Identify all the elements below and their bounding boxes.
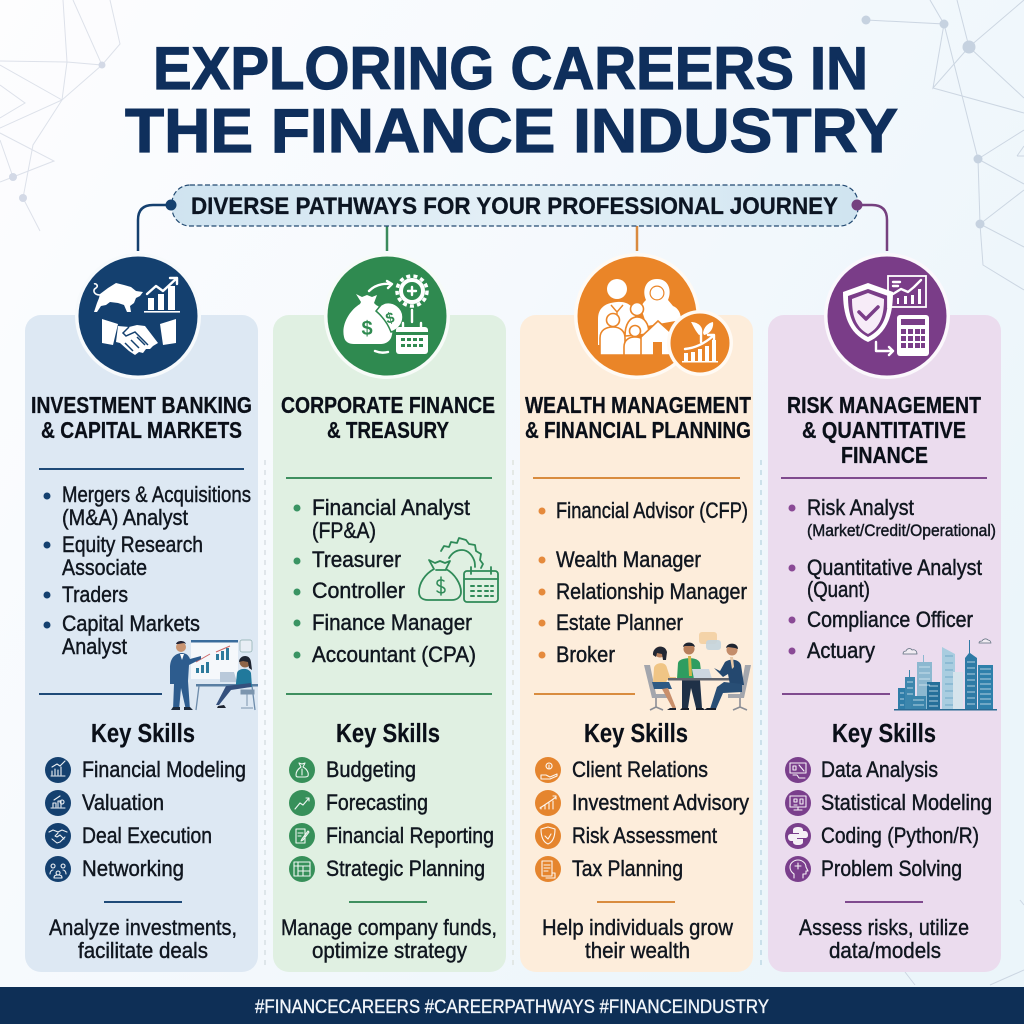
illustration: analyst presentation	[170, 640, 258, 710]
skills list: Valuation	[82, 790, 164, 815]
panel: corporate finance	[273, 253, 506, 972]
icon: shield, chart and calculator	[824, 253, 950, 379]
heading: & TREASURY	[327, 417, 449, 443]
job list: Treasurer	[312, 547, 401, 572]
title	[125, 35, 898, 166]
panel: wealth management	[520, 253, 753, 972]
skills list: Problem Solving	[821, 856, 962, 881]
skills list: Investment Advisory	[572, 790, 750, 815]
skills list: Forecasting	[326, 790, 428, 815]
job list: Relationship Manager	[556, 579, 747, 604]
summary	[49, 915, 237, 963]
heading: FINANCE	[841, 442, 928, 468]
summary: optimize strategy	[312, 938, 467, 963]
job list: Associate	[62, 555, 147, 580]
summary: Manage company funds,	[281, 915, 497, 940]
heading: CORPORATE FINANCE	[281, 392, 495, 418]
subtitle banner	[166, 185, 862, 226]
connector: corporate finance	[386, 226, 388, 251]
footer banner	[0, 987, 1024, 1024]
icon: money bags, gear and calendar: $	[384, 309, 397, 328]
job list: Wealth Manager	[556, 547, 701, 572]
job list: Traders	[62, 582, 128, 607]
summary: Analyze investments,	[49, 915, 237, 940]
job list: Compliance Officer	[807, 607, 973, 632]
skills list	[785, 757, 992, 882]
heading: key skills: Key Skills	[832, 720, 936, 748]
heading	[281, 392, 495, 443]
job list: Actuary	[807, 638, 876, 663]
illustration: money bag, gear and calendar outline	[419, 538, 498, 602]
job list	[294, 495, 476, 667]
job list: (Market/Credit/Operational)	[807, 521, 996, 540]
heading: & CAPITAL MARKETS	[41, 417, 242, 443]
connector: risk management	[857, 205, 887, 251]
job list: Equity Research	[62, 532, 203, 557]
heading	[787, 392, 982, 468]
job list	[788, 495, 996, 663]
heading	[31, 392, 252, 443]
heading: key skills: Key Skills	[336, 720, 440, 748]
skills list: Strategic Planning	[326, 856, 485, 881]
summary	[799, 915, 969, 963]
icon: money bags, gear and calendar	[324, 253, 450, 379]
icon: money bags, gear and calendar: $	[361, 318, 373, 340]
skills list: Risk Assessment	[572, 823, 718, 848]
heading: & FINANCIAL PLANNING	[525, 417, 751, 443]
job list: Estate Planner	[556, 610, 683, 635]
heading: key skills: Key Skills	[91, 720, 195, 748]
job list: Broker	[556, 642, 615, 667]
job list: Capital Markets	[62, 611, 200, 636]
summary: facilitate deals	[78, 938, 208, 963]
heading: INVESTMENT BANKING	[31, 392, 252, 418]
connector: investment banking	[138, 205, 171, 251]
footer banner: #FINANCECAREERS #CAREERPATHWAYS #FINANCEINDUSTRY	[255, 997, 769, 1018]
skills list: Statistical Modeling	[821, 790, 992, 815]
job list: Financial Advisor (CFP)	[556, 498, 748, 523]
title: EXPLORING CAREERS IN	[153, 35, 868, 102]
illustration: client meeting	[644, 632, 751, 710]
panel: investment banking	[25, 253, 258, 972]
job list: Analyst	[62, 634, 128, 659]
dashed separators	[265, 460, 761, 970]
job list	[538, 498, 748, 667]
summary: Assess risks, utilize	[799, 915, 969, 940]
icon: family and growth	[574, 253, 733, 379]
summary: Help individuals grow	[542, 915, 733, 940]
illustration: city skyline	[894, 639, 997, 710]
job list: Finance Manager	[312, 610, 472, 635]
skills list: Financial Reporting	[326, 823, 494, 848]
job list: Controller	[312, 578, 405, 603]
skills list	[45, 757, 246, 882]
job list: Accountant (CPA)	[312, 642, 476, 667]
skills list: Budgeting	[326, 757, 416, 782]
job list: Financial Analyst	[312, 495, 471, 520]
job list: Mergers & Acquisitions	[62, 482, 251, 507]
skills list: Data Analysis	[821, 757, 938, 782]
summary: their wealth	[585, 938, 690, 963]
summary: data/models	[829, 938, 941, 963]
skills list	[535, 757, 750, 882]
summary	[281, 915, 497, 963]
job list: (FP&A)	[312, 518, 376, 543]
skills list: Tax Planning	[572, 856, 683, 881]
skills list: Coding (Python/R)	[821, 823, 979, 848]
job list: (Quant)	[807, 577, 870, 602]
heading: WEALTH MANAGEMENT	[525, 392, 752, 418]
skills list	[289, 757, 494, 882]
skills list: Networking	[82, 856, 184, 881]
heading	[525, 392, 752, 443]
skills list: Financial Modeling	[82, 757, 246, 782]
icon: bull and handshake	[75, 253, 201, 379]
panel: risk management	[768, 253, 1001, 972]
subtitle banner: DIVERSE PATHWAYS FOR YOUR PROFESSIONAL JOURNEY	[191, 193, 838, 220]
heading: RISK MANAGEMENT	[787, 392, 982, 418]
heading: & QUANTITATIVE	[802, 417, 966, 443]
job list: Risk Analyst	[807, 495, 915, 520]
skills list: Deal Execution	[82, 823, 212, 848]
title: THE FINANCE INDUSTRY	[125, 97, 898, 166]
skills list: Client Relations	[572, 757, 708, 782]
connector: wealth management	[636, 226, 638, 251]
job list	[44, 482, 251, 659]
job list: Quantitative Analyst	[807, 555, 983, 580]
job list: (M&A) Analyst	[62, 505, 189, 530]
summary	[542, 915, 733, 963]
heading: key skills: Key Skills	[584, 720, 688, 748]
